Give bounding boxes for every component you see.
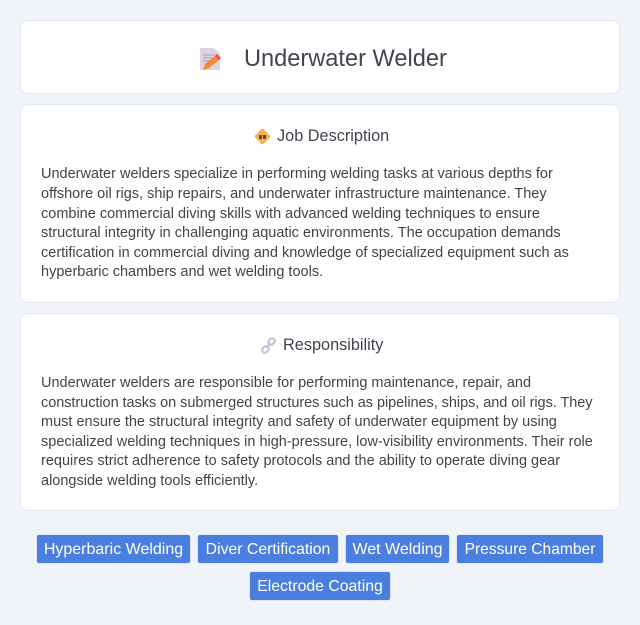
tag: electrode coating xyxy=(249,571,391,601)
icon: memo with pencil xyxy=(200,48,221,70)
heading: responsibility: Responsibility xyxy=(283,336,383,354)
tag: wet welding xyxy=(345,534,450,564)
title: Underwater Welder xyxy=(244,46,447,72)
tag: pressure chamber xyxy=(456,534,604,564)
text block: responsibility: Underwater welders are responsible for performing maintenance, repair, and xyxy=(41,375,531,391)
tag: wet welding: Wet Welding xyxy=(352,541,443,558)
panel: job description xyxy=(20,104,620,303)
tag: pressure chamber: Pressure Chamber xyxy=(465,541,595,558)
tag: hyperbaric welding: Hyperbaric Welding xyxy=(44,541,183,558)
tags xyxy=(36,534,604,601)
text block: responsibility: specialized welding techniques in high-pressure, low-visibility environments. Their role xyxy=(41,434,593,450)
text block: job description: structural integrity in challenging aquatic environments. The occupation demands xyxy=(41,225,561,241)
tag: diver certification: Diver Certification xyxy=(206,541,330,558)
text block: job description: Underwater welders specialize in performing welding tasks at various depths for xyxy=(41,166,553,182)
icon: diamond sign xyxy=(254,128,270,144)
text block: job description: offshore oil rigs, ship repairs, and underwater infrastructure maintenance. They xyxy=(41,186,547,202)
text block: responsibility xyxy=(41,375,593,489)
tag: hyperbaric welding xyxy=(36,534,191,564)
text block: responsibility: requires strict adherence to safety protocols and the ability to operate diving gear xyxy=(41,453,560,469)
text block: responsibility: construction tasks on submerged structures such as pipelines, ships, and oil rigs. They xyxy=(41,395,592,411)
text block: job description: combine commercial diving skills with advanced welding techniques to ensure xyxy=(41,206,540,222)
heading: job description: Job Description xyxy=(277,127,389,145)
tag: electrode coating: Electrode Coating xyxy=(257,578,383,595)
text block: job description: hyperbaric chambers and wet welding tools. xyxy=(41,264,323,280)
tag: diver certification xyxy=(197,534,339,564)
icon: chain link xyxy=(261,337,276,354)
panel: responsibility xyxy=(20,313,620,511)
panel: title card xyxy=(20,20,620,94)
text block: responsibility: must ensure the structural integrity and safety of underwater equipment by using xyxy=(41,414,557,430)
text block: job description: certification in commercial diving and knowledge of specialized equipment such as xyxy=(41,245,569,261)
text block: responsibility: alongside welding tools efficiently. xyxy=(41,473,258,489)
text block: job description xyxy=(41,166,569,280)
